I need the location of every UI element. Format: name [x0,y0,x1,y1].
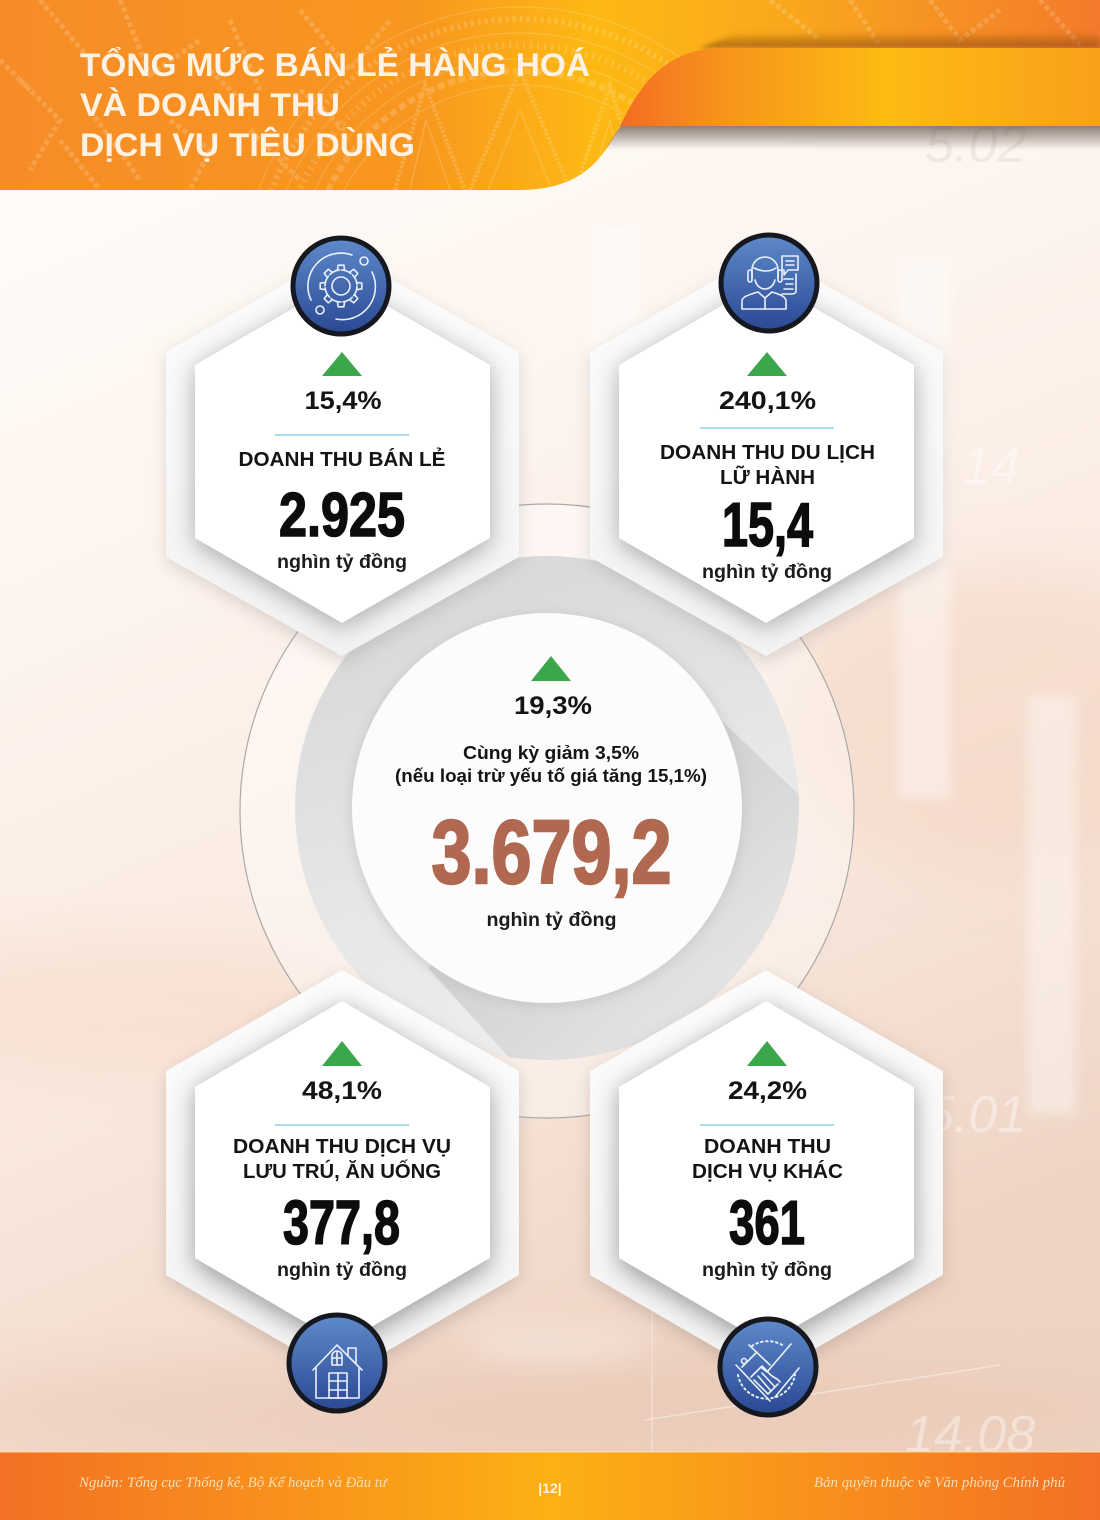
panel heading [660,442,875,489]
title: VÀ DOANH THU [80,87,340,123]
value: 2.925 [279,481,405,550]
page number: |12| [538,1480,562,1496]
title: TỔNG MỨC BÁN LẺ HÀNG HOÁ [80,47,590,83]
panel heading: LƯU TRÚ, ĂN UỐNG [243,1159,441,1183]
growth value: 24,2% [728,1077,807,1105]
unit: nghìn tỷ đồng [702,1260,832,1281]
up arrow [747,1041,787,1066]
icon: house [289,1315,385,1411]
center up arrow [531,656,571,681]
page background: 5.01 [925,1086,1026,1144]
center note: (nếu loại trừ yếu tố giá tăng 15,1%) [395,766,707,786]
center white circle [352,613,742,1003]
unit: nghìn tỷ đồng [277,1260,407,1281]
copyright note: Bản quyền thuộc về Văn phòng Chính phủ [814,1475,1065,1491]
center note [395,743,707,786]
header banner [0,0,1100,190]
value: 15,4 [722,491,813,560]
center unit: nghìn tỷ đồng [486,910,616,931]
drum pattern [0,0,1082,190]
icon: gear [293,238,389,334]
value: 377,8 [283,1189,400,1258]
center content [395,656,707,931]
panel heading: DOANH THU BÁN LẺ [238,448,446,471]
growth value: 240,1% [719,387,816,415]
ribbon [620,48,1100,126]
footer [0,1451,1100,1520]
growth value: 15,4% [304,387,382,415]
center ring and disc backdrop [240,504,854,1118]
up arrow [322,352,362,376]
unit: nghìn tỷ đồng [702,562,832,583]
ribbon shadow [604,126,1100,150]
page background: 14.08 [905,1406,1035,1464]
panel heading: DOANH THU [704,1136,831,1158]
up arrow [322,1041,362,1066]
panel heading: DỊCH VỤ KHÁC [692,1160,843,1183]
page background: 14 [962,438,1020,496]
title [80,47,590,163]
up arrow [747,352,787,376]
growth value: 48,1% [302,1077,382,1105]
title: DỊCH VỤ TIÊU DÙNG [80,127,415,163]
value: 361 [729,1189,805,1258]
panel heading: LỮ HÀNH [720,465,815,489]
panel: accommodation and food revenue [166,970,519,1385]
unit: nghìn tỷ đồng [277,552,407,573]
center growth value: 19,3% [514,692,592,720]
panel heading: DOANH THU DU LỊCH [660,442,875,464]
page background: 5.02 [925,116,1026,174]
source note: Nguồn: Tổng cục Thống kê, Bộ Kế hoạch và Đầu tư [78,1475,388,1491]
panel heading [233,1136,451,1183]
panel heading [692,1136,843,1183]
icon: call-centre agent [721,235,817,331]
icon: handshake [720,1319,816,1415]
center total value: 3.679,2 [432,803,672,903]
center note: Cùng kỳ giảm 3,5% [463,743,639,763]
panel: retail revenue [166,251,519,664]
panel: travel revenue [590,251,943,664]
panel heading: DOANH THU DỊCH VỤ [233,1136,451,1158]
panel: other services revenue [590,970,943,1385]
